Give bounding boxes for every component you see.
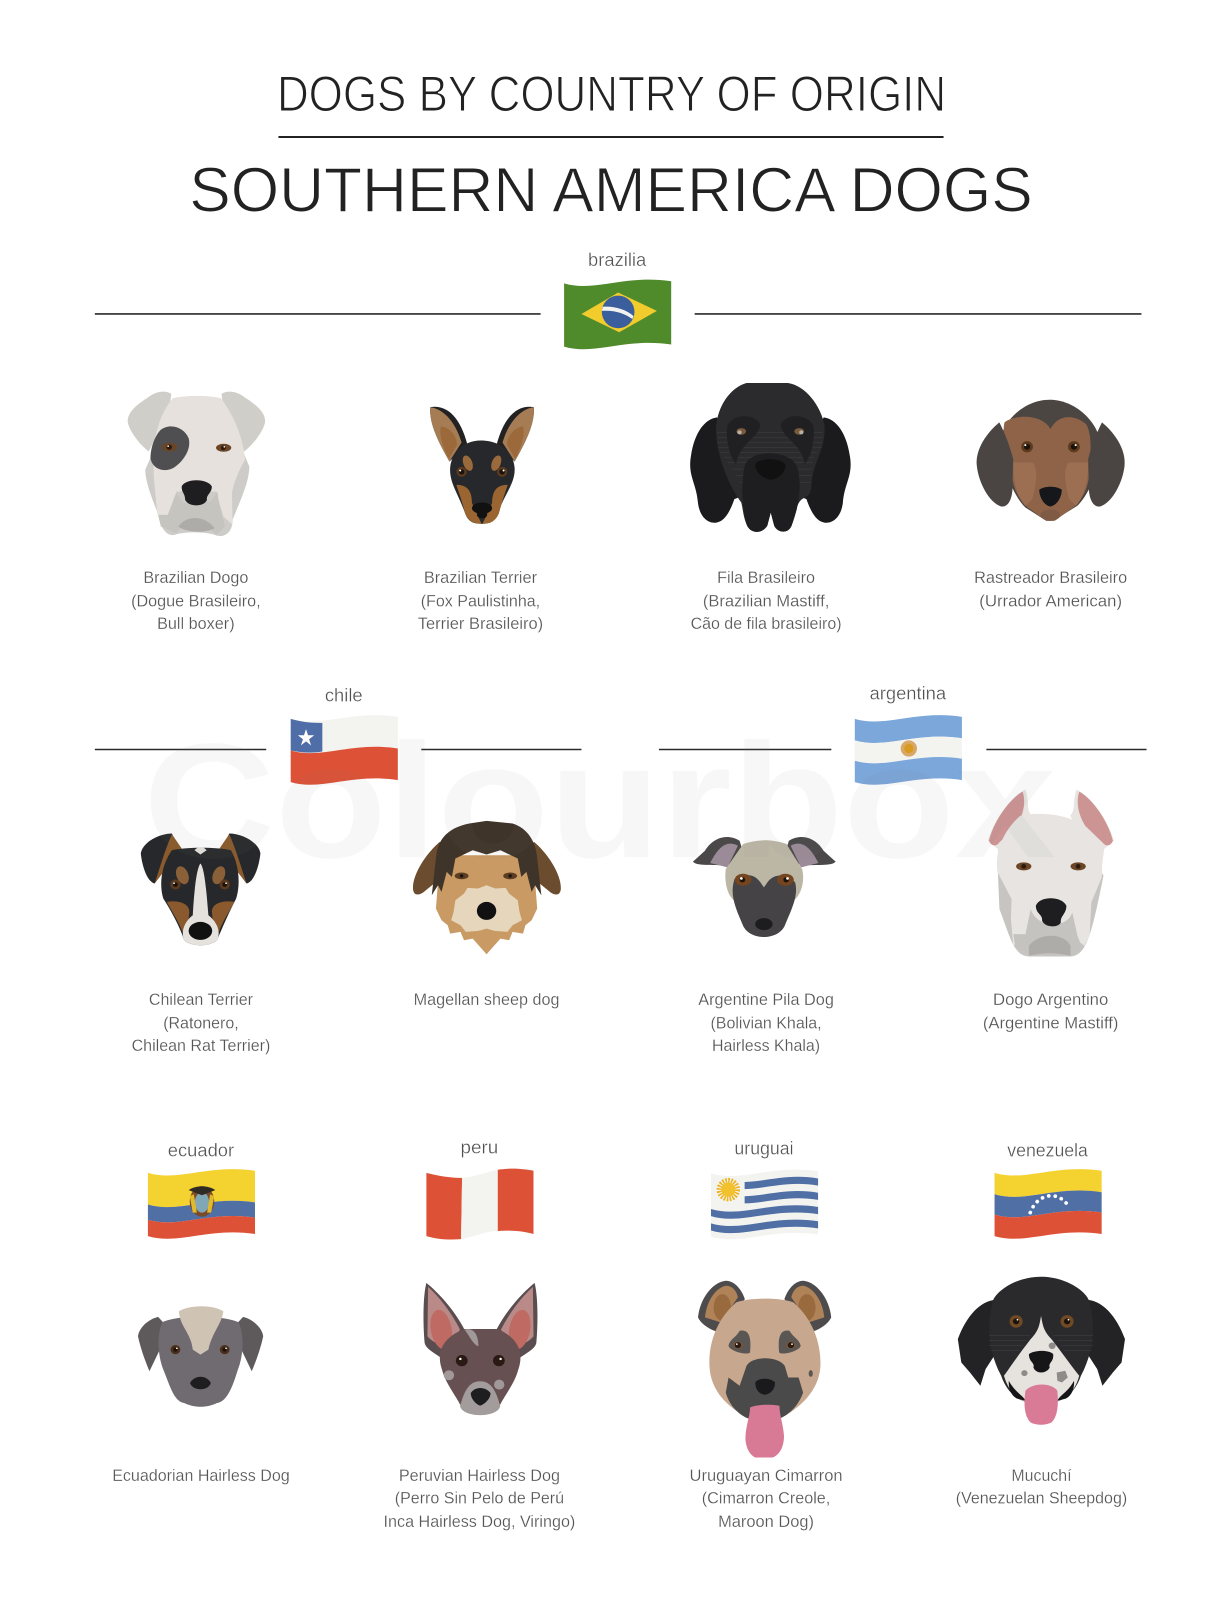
dog: Uruguayan Cimarron bbox=[698, 1281, 831, 1458]
caption: Peruvian Hairless Dog bbox=[384, 1466, 575, 1531]
caption: Brazilian Terrier: Brazilian Terrier bbox=[424, 568, 537, 587]
caption: Chilean Terrier bbox=[132, 990, 270, 1055]
caption: Uruguayan Cimarron: (Cimarron Creole, bbox=[702, 1488, 830, 1507]
caption: Brazilian Dogo: (Dogue Brasileiro, bbox=[131, 592, 261, 611]
country label: chile: chile bbox=[325, 685, 363, 706]
country label: uruguai: uruguai bbox=[734, 1137, 794, 1158]
caption: Magellan sheep dog: Magellan sheep dog bbox=[414, 990, 559, 1009]
caption: Brazilian Terrier: Terrier Brasileiro) bbox=[418, 614, 543, 633]
dog: Mucuchi bbox=[958, 1277, 1125, 1425]
caption: Mucuchi bbox=[956, 1466, 1127, 1507]
panel: brazil bbox=[95, 249, 1141, 633]
caption: Chilean Terrier: Chilean Rat Terrier) bbox=[132, 1036, 270, 1055]
panel: chile bbox=[95, 685, 581, 1055]
dog: Fila Brasileiro bbox=[690, 383, 851, 532]
flag: peru bbox=[426, 1169, 533, 1240]
country label: venezuela: venezuela bbox=[1007, 1140, 1089, 1161]
caption: Argentine Pila Dog bbox=[698, 990, 834, 1055]
caption: Chilean Terrier: Chilean Terrier bbox=[149, 990, 253, 1009]
country label: ecuador: ecuador bbox=[168, 1140, 234, 1161]
panel: venezuela bbox=[956, 1140, 1127, 1507]
dog: Magellan sheep dog bbox=[413, 821, 561, 954]
caption: Uruguayan Cimarron bbox=[690, 1466, 843, 1531]
caption: Fila Brasileiro: (Brazilian Mastiff, bbox=[703, 592, 829, 611]
flag: uruguay bbox=[711, 1170, 818, 1239]
caption: Argentine Pila Dog: (Bolivian Khala, bbox=[710, 1013, 822, 1032]
caption: Peruvian Hairless Dog: Inca Hairless Dog, Viringo) bbox=[384, 1512, 575, 1531]
dog: Rastreador Brasileiro bbox=[977, 400, 1125, 521]
caption: Mucuchi: Mucuchí bbox=[1011, 1466, 1072, 1485]
panel: peru bbox=[384, 1136, 575, 1531]
caption: Argentine Pila Dog: Argentine Pila Dog bbox=[698, 990, 834, 1009]
dog: Dogo Argentino bbox=[988, 790, 1114, 956]
caption: Argentine Pila Dog: Hairless Khala) bbox=[712, 1036, 820, 1055]
dog: Chilean Terrier bbox=[141, 834, 260, 945]
flag: ecuador bbox=[148, 1169, 255, 1239]
title: dogs by country of origin: DOGS BY COUNTRY OF ORIGIN bbox=[277, 66, 946, 122]
caption: Uruguayan Cimarron: Maroon Dog) bbox=[718, 1512, 814, 1531]
country label: argentina: argentina bbox=[870, 683, 947, 704]
caption: Brazilian Dogo: Brazilian Dogo bbox=[143, 568, 248, 587]
flag: venezuela bbox=[995, 1169, 1102, 1239]
caption: Mucuchi: (Venezuelan Sheepdog) bbox=[956, 1488, 1127, 1507]
flag: argentina bbox=[855, 715, 962, 785]
dog: Brazilian Terrier bbox=[430, 407, 534, 524]
caption: Dogo Argentino bbox=[983, 990, 1118, 1032]
title: southern america dogs: SOUTHERN AMERICA DOGS bbox=[189, 155, 1033, 225]
dog: Brazilian Dogo bbox=[128, 392, 265, 536]
panel: argentina bbox=[659, 683, 1147, 1055]
caption: Peruvian Hairless Dog: (Perro Sin Pelo de Perú bbox=[395, 1488, 564, 1507]
caption: Chilean Terrier: (Ratonero, bbox=[163, 1013, 239, 1032]
panel: ecuador bbox=[112, 1140, 290, 1485]
caption: Brazilian Dogo: Bull boxer) bbox=[157, 614, 235, 633]
caption: Ecuadorian Hairless Dog: Ecuadorian Hairless Dog bbox=[112, 1466, 290, 1485]
caption: Rastreador Brasileiro: (Urrador American) bbox=[979, 592, 1122, 611]
caption: Rastreador Brasileiro: Rastreador Brasileiro bbox=[974, 568, 1127, 587]
caption: Uruguayan Cimarron: Uruguayan Cimarron bbox=[690, 1466, 843, 1485]
caption: Dogo Argentino: Dogo Argentino bbox=[993, 990, 1108, 1009]
flag: chile bbox=[291, 715, 398, 785]
caption: Dogo Argentino: (Argentine Mastiff) bbox=[983, 1013, 1118, 1032]
caption: Brazilian Terrier: (Fox Paulistinha, bbox=[421, 592, 540, 611]
country label: peru: peru bbox=[461, 1136, 498, 1157]
caption: Brazilian Terrier bbox=[418, 568, 543, 633]
country label: brazilia: brazilia bbox=[588, 249, 647, 270]
caption: Brazilian Dogo bbox=[131, 568, 261, 633]
caption: Peruvian Hairless Dog: Peruvian Hairless Dog bbox=[399, 1466, 560, 1485]
dog: Peruvian Hairless Dog bbox=[424, 1283, 537, 1415]
flag: brazil bbox=[564, 280, 671, 349]
panel: uruguay bbox=[690, 1137, 843, 1531]
dog: Ecuadorian Hairless Dog bbox=[138, 1306, 263, 1407]
title block bbox=[189, 66, 1033, 225]
caption: Rastreador Brasileiro bbox=[974, 568, 1127, 611]
caption: Fila Brasileiro: Fila Brasileiro bbox=[717, 568, 815, 587]
caption: Fila Brasileiro bbox=[691, 568, 842, 633]
watermark: Colourbox bbox=[143, 709, 1056, 892]
dog: Argentine Pila Dog bbox=[693, 837, 836, 937]
caption: Fila Brasileiro: Cão de fila brasileiro) bbox=[691, 614, 842, 633]
